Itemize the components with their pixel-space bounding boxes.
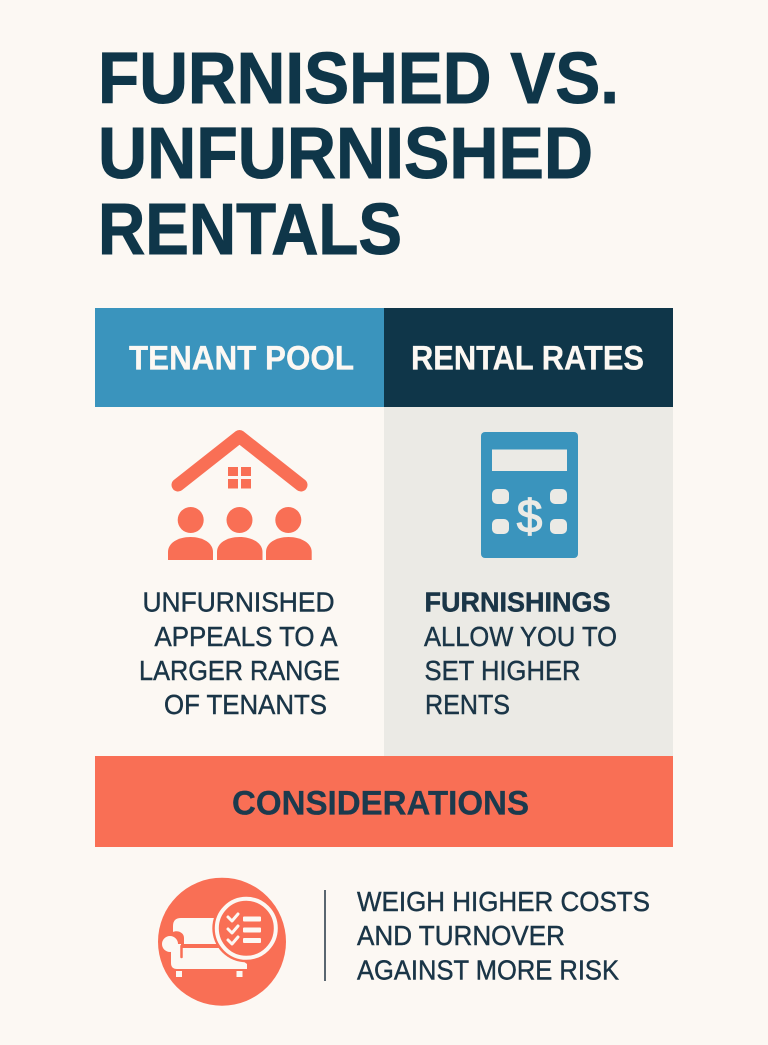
title: UNFURNISHED <box>98 114 593 194</box>
text: considerations description: AND TURNOVER <box>357 920 565 951</box>
text: considerations description: WEIGH HIGHER COSTS <box>357 886 650 917</box>
text: tenant pool description: LARGER RANGE <box>139 655 340 686</box>
text: tenant pool description: OF TENANTS <box>164 689 327 720</box>
panel background <box>384 407 673 756</box>
title <box>98 39 619 270</box>
heading: rental rates: RENTAL RATES <box>411 340 644 378</box>
panel: tenant pool <box>95 308 384 720</box>
text: considerations description: AGAINST MORE RISK <box>357 954 619 986</box>
banner: considerations: CONSIDERATIONS <box>232 784 529 822</box>
text: rental rates description: ALLOW YOU TO <box>424 621 617 652</box>
text: rental rates description <box>424 586 617 720</box>
title: FURNISHED VS. <box>98 39 619 119</box>
text: tenant pool description <box>139 586 340 720</box>
icon: calculator <box>481 432 578 558</box>
icon: sofa with checklist <box>158 878 286 1006</box>
text: tenant pool description: UNFURNISHED <box>142 586 334 618</box>
text: rental rates description: SET HIGHER <box>424 655 580 686</box>
title: RENTALS <box>98 190 402 270</box>
panel: rental rates <box>384 308 673 756</box>
text: rental rates description: RENTS <box>425 689 510 720</box>
heading: rental rates <box>384 308 673 407</box>
text: tenant pool description: APPEALS TO A <box>154 621 338 652</box>
icon: calculator: $ <box>517 490 542 542</box>
text: rental rates description: FURNISHINGS <box>424 586 610 618</box>
text: considerations description <box>357 886 650 986</box>
icon: house with people <box>168 436 312 560</box>
heading: tenant pool: TENANT POOL <box>129 340 354 378</box>
heading: tenant pool <box>95 308 384 407</box>
banner: considerations <box>95 756 673 847</box>
